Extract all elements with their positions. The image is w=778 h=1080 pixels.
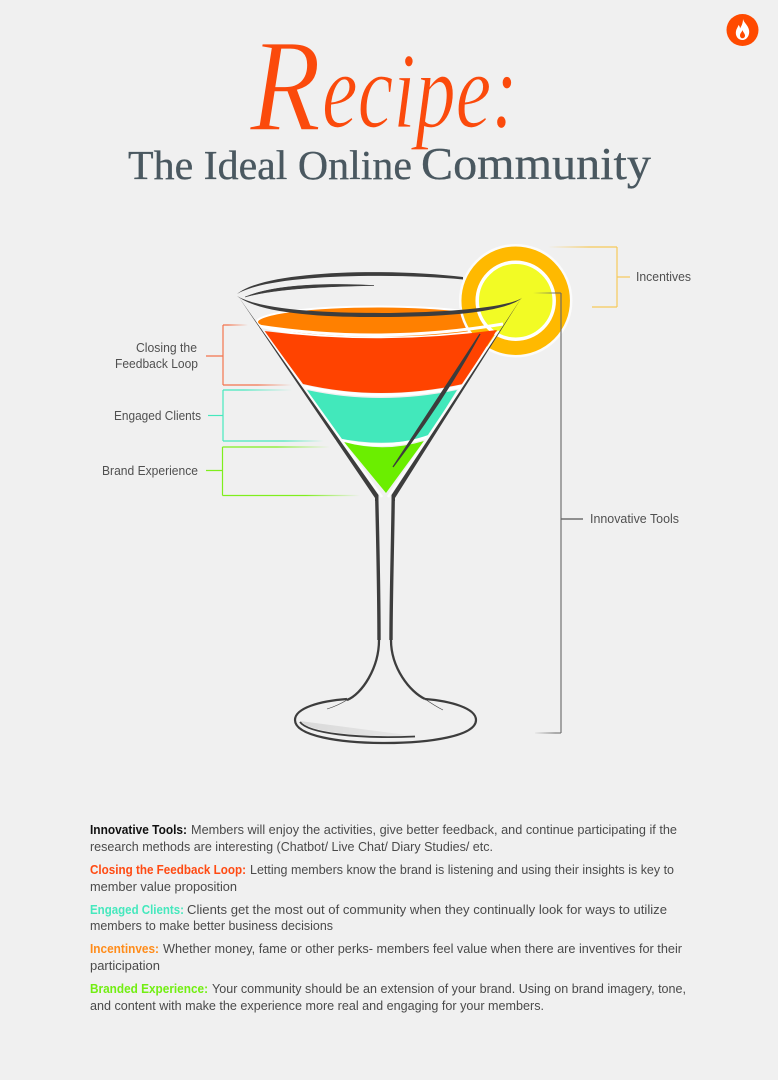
- text block: Closing the Feedback Loop: member value proposition: [90, 879, 237, 894]
- liquid: red layer: [264, 330, 497, 393]
- text block: Engaged Clients: Clients get the most out of community when they continually look for ways to utilize: [187, 902, 667, 917]
- text block: Innovative Tools: Members will enjoy the activities, give better feedback, and continue participating if the: [191, 822, 677, 837]
- white inner edge of glass walls: [263, 331, 499, 497]
- text block: Closing the Feedback Loop: Letting members know the brand is listening and using their insights is key to: [250, 862, 674, 877]
- text block: Branded Experience: Your community should be an extension of your brand. Using on brand imagery, tone,: [212, 981, 686, 996]
- liquid: teal layer: [307, 390, 457, 443]
- text block: Branded Experience: [90, 981, 686, 1013]
- text block: Branded Experience: Branded Experience:: [90, 981, 208, 996]
- text block: Incentinves: Incentinves:: [90, 941, 159, 956]
- title: Recipe: R: [249, 12, 321, 159]
- liquid: green layer: [344, 441, 424, 493]
- label: Incentives with bracket: Incentives: [636, 270, 691, 284]
- subtitle: The Ideal Online Community: [128, 138, 651, 189]
- label: Closing the Feedback Loop with bracket: Feedback Loop: [115, 357, 198, 371]
- subtitle: The Ideal Online Community: Community: [421, 138, 651, 189]
- martini glass: [237, 245, 571, 743]
- title: Recipe: ecipe:: [322, 32, 518, 151]
- glass base: [295, 699, 476, 743]
- title: Recipe: [249, 12, 518, 159]
- text block: Incentinves: Whether money, fame or other perks- members feel value when there are inventives for their: [163, 941, 683, 956]
- label: Engaged Clients with bracket: Engaged Clients: [114, 409, 201, 423]
- text block: Engaged Clients: Engaged Clients:: [90, 902, 184, 917]
- stem: [327, 500, 443, 710]
- text block: Closing the Feedback Loop: [90, 862, 674, 894]
- text block: Innovative Tools: Innovative Tools:: [90, 822, 187, 837]
- text block: Incentinves: participation: [90, 958, 160, 973]
- label: Closing the Feedback Loop with bracket: [115, 325, 292, 385]
- liquid: orange top surface: [257, 306, 499, 338]
- glass right wall: [392, 297, 522, 501]
- straw: [393, 334, 480, 467]
- text block: Engaged Clients: members to make better business decisions: [90, 918, 333, 933]
- glass rim front: [237, 296, 522, 317]
- text block: Engaged Clients: [90, 902, 667, 933]
- icon: citrus slice: [460, 245, 571, 356]
- subtitle: The Ideal Online Community: The Ideal Online: [128, 142, 412, 188]
- glass rim back: [237, 272, 463, 294]
- logo: flame badge: [726, 14, 758, 46]
- text block: Innovative Tools: [90, 822, 677, 854]
- glass left wall: [238, 296, 378, 501]
- text block: Closing the Feedback Loop: Closing the Feedback Loop:: [90, 862, 246, 877]
- text block: Incentinves: [90, 941, 683, 973]
- text block: Branded Experience: and content with make the experience more real and engaging for your members.: [90, 998, 544, 1013]
- label: Brand Experience with bracket: Brand Experience: [102, 464, 198, 478]
- label: Closing the Feedback Loop with bracket: Closing the: [136, 341, 197, 355]
- text block: Innovative Tools: research methods are interesting (Chatbot/ Live Chat/ Diary Studies/ etc.: [90, 839, 493, 854]
- label: Innovative Tools with bracket: Innovative Tools: [590, 512, 679, 526]
